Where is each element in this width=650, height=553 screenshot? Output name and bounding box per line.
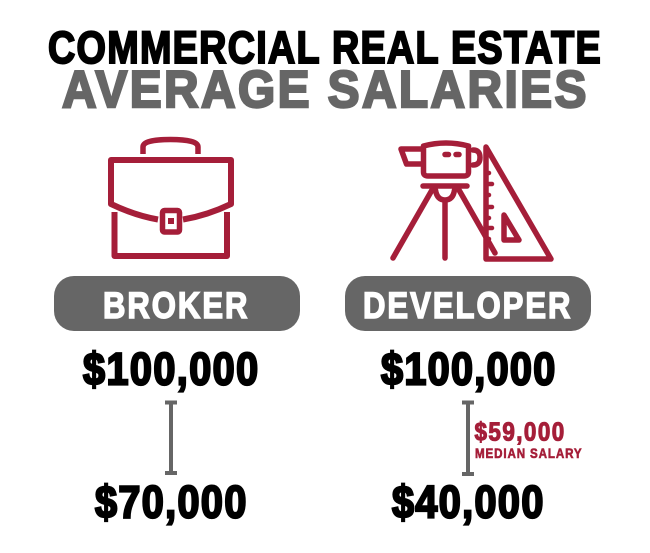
title line 1: COMMERCIAL REAL ESTATE — [48, 22, 601, 73]
broker high salary: $100,000 — [83, 344, 258, 394]
developer range bracket — [462, 402, 474, 474]
broker range bracket — [165, 402, 177, 473]
median salary label: MEDIAN SALARY — [475, 446, 582, 461]
icon: briefcase — [111, 140, 231, 256]
developer high salary: $100,000 — [381, 344, 555, 394]
developer low salary: $40,000 — [392, 477, 543, 527]
panel: developer label: DEVELOPER — [363, 286, 570, 327]
panel: broker label — [54, 276, 300, 331]
broker low salary: $70,000 — [95, 477, 246, 527]
title line 2: AVERAGE SALARIES — [62, 60, 586, 118]
developer median salary: $59,000 — [474, 418, 564, 447]
panel: broker label: BROKER — [103, 286, 247, 327]
panel: developer label — [345, 276, 591, 331]
icon: surveying level and set square — [393, 143, 551, 259]
